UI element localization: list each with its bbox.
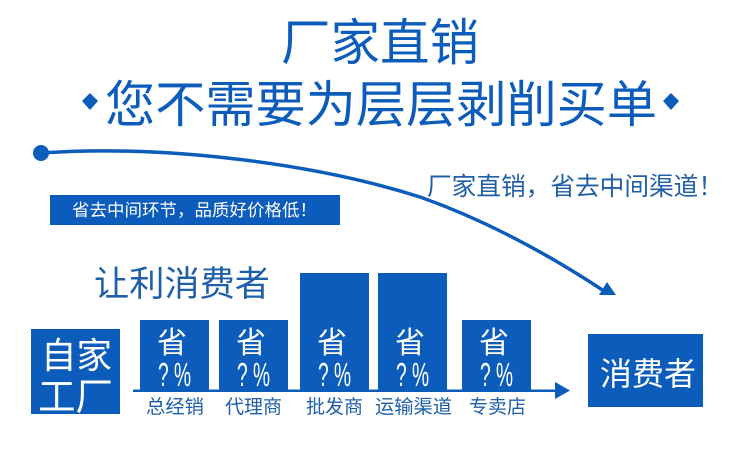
arrow: curved direct sales route	[33, 145, 616, 295]
banner: fewer middle links: 省去中间环节，品质好价格低！	[72, 196, 317, 221]
panel: factory: 工厂	[38, 377, 113, 419]
heading: benefits to consumers: 让利消费者	[94, 265, 270, 304]
subtitle text: 您不需要为层层剥削买单	[105, 77, 657, 133]
bar: transport channels: 运输渠道	[375, 396, 452, 418]
bar: general distributor	[140, 320, 209, 418]
title line 1: 厂家直销	[281, 15, 479, 71]
bar: agent	[219, 320, 288, 418]
bar: wholesaler	[300, 273, 369, 418]
bar: agent: 代理商	[225, 396, 282, 418]
bar: transport channels	[375, 273, 452, 418]
panel: consumer: 消费者	[600, 356, 696, 392]
icon: right diamond	[663, 93, 679, 110]
bar: general distributor: ? %	[158, 356, 191, 393]
arrow: distribution chain axis	[133, 382, 570, 399]
banner: fewer middle links	[50, 195, 340, 225]
panel: factory	[31, 329, 120, 419]
bar: general distributor: 总经销	[146, 396, 204, 418]
callout: direct sales text: 厂家直销，省去中间渠道！	[427, 167, 723, 203]
bar: specialty store	[462, 320, 531, 418]
panel: factory: 自家	[41, 335, 112, 376]
bar: agent: ? %	[237, 356, 270, 393]
bar: transport channels: 省	[395, 327, 425, 360]
bar: wholesaler: ? %	[318, 356, 351, 393]
bar: wholesaler: 批发商	[306, 396, 363, 418]
bar: transport channels: ? %	[396, 356, 429, 393]
bar: wholesaler: 省	[317, 327, 347, 360]
bar: specialty store: ? %	[480, 356, 513, 393]
bar: specialty store: 省	[479, 327, 509, 360]
icon: left diamond	[82, 93, 98, 110]
panel: consumer	[588, 334, 703, 407]
bar: general distributor: 省	[157, 327, 187, 360]
title line 2	[82, 77, 679, 133]
bar: specialty store: 专卖店	[469, 396, 526, 418]
bar: agent: 省	[236, 327, 266, 360]
